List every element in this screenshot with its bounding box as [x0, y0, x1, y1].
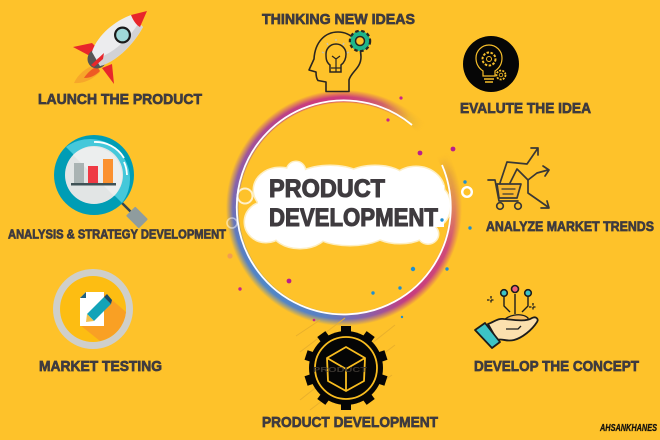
cloud behind center title [245, 162, 450, 248]
icon: rocket [73, 11, 147, 84]
central ring white arc [237, 100, 451, 314]
center title: PRODUCT [269, 175, 385, 203]
center title: DEVELOPMENT [269, 204, 438, 232]
central ring glow [226, 90, 461, 326]
icon: document and pencil badge [53, 269, 133, 349]
icon: gear with box [305, 326, 387, 410]
label: evalute the idea: EVALUTE THE IDEA [460, 100, 591, 117]
icon: hand holding circuit nodes [475, 286, 538, 348]
confetti dots [227, 96, 472, 321]
label: product development: PRODUCT DEVELOPMENT [262, 414, 438, 431]
label: launch the product: LAUNCH THE PRODUCT [38, 91, 202, 108]
icon: gear with box: PRODUCT [313, 367, 368, 374]
icon: black circle with bulb and gears [463, 36, 519, 92]
label: develop the concept: DEVELOP THE CONCEPT [474, 358, 639, 375]
label: thinking new ideas: THINKING NEW IDEAS [262, 11, 415, 28]
label: market testing: MARKET TESTING [39, 358, 162, 375]
icon: shopping cart with trend arrows [488, 148, 549, 209]
icon: magnifier with bar chart [54, 135, 148, 228]
icon: head with light bulb and gear [309, 31, 370, 92]
decorative stripes behind gear [296, 318, 395, 410]
label: analysis and strategy development: ANALYSIS & STRATEGY DEVELOPMENT [8, 228, 226, 242]
center title [269, 175, 444, 232]
